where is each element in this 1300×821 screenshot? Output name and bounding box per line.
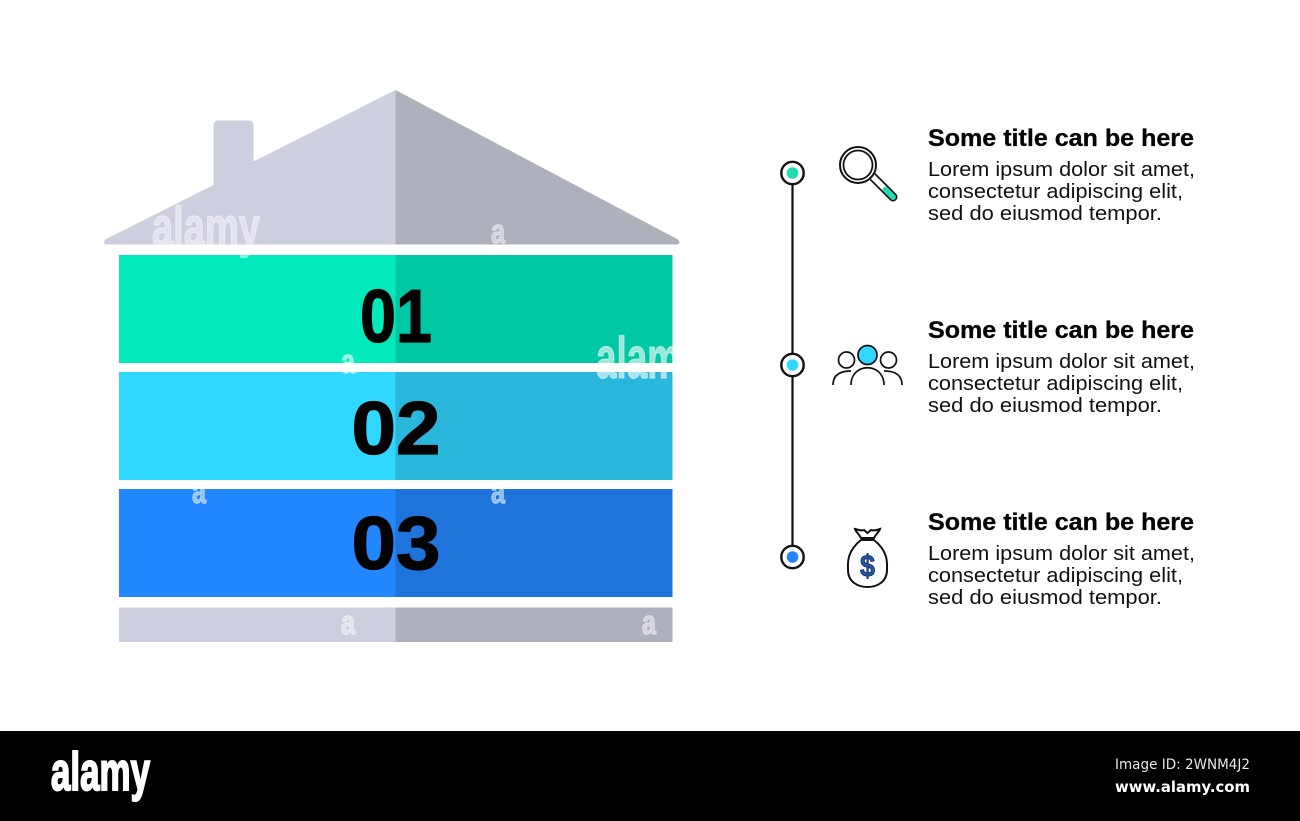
text block 1 [928, 125, 1195, 225]
body 2: Lorem ipsum dolor sit amet, [928, 351, 1195, 373]
icon: money bag [848, 529, 887, 587]
body 2 [928, 351, 1195, 417]
floor 01 band: 01 [360, 274, 432, 358]
watermarks: a [192, 473, 207, 511]
website: www.alamy.com [1115, 778, 1250, 796]
dollar sign: $ [860, 548, 875, 583]
body 2: sed do eiusmod tempor. [928, 395, 1162, 417]
house illustration [104, 90, 680, 642]
body 1 [928, 159, 1195, 225]
watermarks: a [491, 213, 506, 251]
watermarks: a [642, 604, 657, 642]
body 3 [928, 543, 1195, 609]
watermarks [152, 195, 680, 642]
body 2: consectetur adipiscing elit, [928, 373, 1183, 395]
footer logo: alamy [51, 742, 150, 802]
icon: group of people [833, 346, 902, 385]
body 1: sed do eiusmod tempor. [928, 203, 1162, 225]
foundation band [119, 608, 672, 642]
timeline [781, 162, 804, 568]
body 3: Lorem ipsum dolor sit amet, [928, 543, 1195, 565]
floor 02 band [119, 372, 672, 480]
watermarks: a [341, 604, 356, 642]
body 1: Lorem ipsum dolor sit amet, [928, 159, 1195, 181]
floor 02 band: 02 [352, 386, 440, 470]
text block 2 [928, 317, 1195, 417]
heading 1: Some title can be here [928, 125, 1194, 152]
roof with chimney [104, 90, 680, 244]
watermarks: a [491, 473, 506, 511]
watermarks: alamy [152, 195, 260, 258]
floor 03 band [119, 489, 672, 597]
icon: magnifying glass [840, 147, 893, 197]
footer bar [0, 731, 1300, 821]
floor 01 band [119, 255, 672, 363]
body 3: consectetur adipiscing elit, [928, 565, 1183, 587]
body 1: consectetur adipiscing elit, [928, 181, 1183, 203]
heading 2: Some title can be here [928, 317, 1194, 344]
heading 3: Some title can be here [928, 509, 1194, 536]
floor 03 band: 03 [352, 501, 440, 585]
watermarks: a [341, 343, 356, 381]
image id: Image ID: 2WNM4J2 [1115, 757, 1250, 773]
body 3: sed do eiusmod tempor. [928, 587, 1162, 609]
timeline node 3 [781, 546, 804, 568]
timeline node 1 [781, 162, 804, 184]
watermarks: alam [596, 326, 680, 391]
timeline node 2 [781, 354, 804, 376]
text block 3 [928, 509, 1195, 609]
